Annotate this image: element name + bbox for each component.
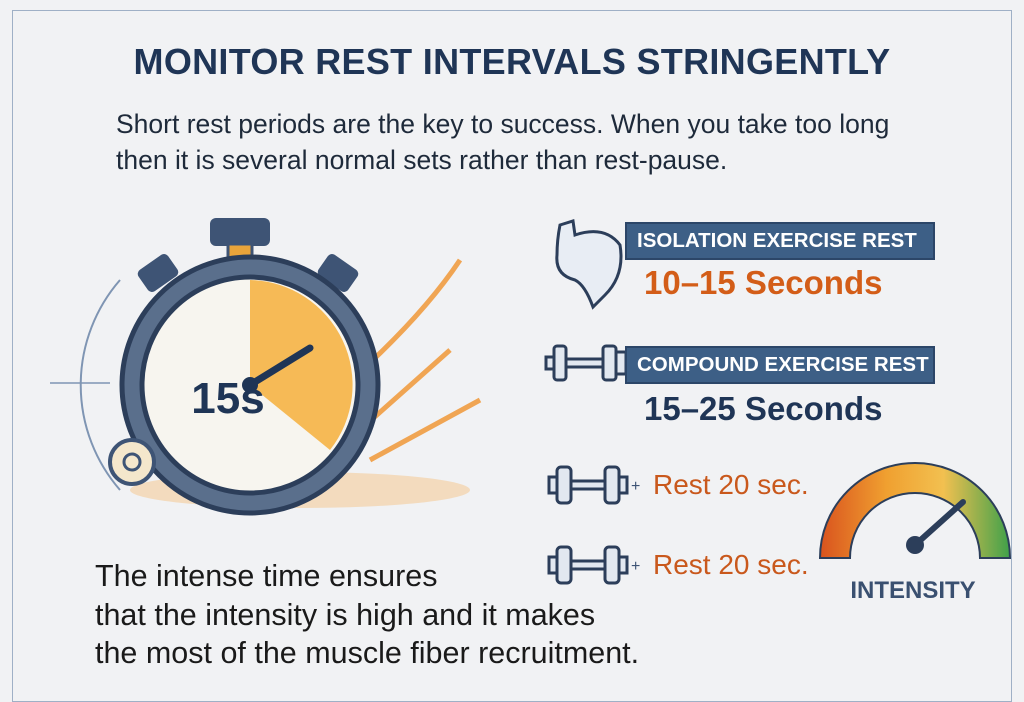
- rest row 1: Rest 20 sec.: [653, 469, 809, 500]
- banner: compound: [625, 346, 935, 384]
- bottom text: that the intensity is high and it makes: [95, 598, 595, 632]
- icon: barbell: [544, 344, 625, 382]
- subtitle text: [116, 109, 889, 175]
- gauge: intensity: [819, 462, 1011, 604]
- gauge: intensity: INTENSITY: [850, 577, 976, 604]
- bottom text: The intense time ensures: [95, 559, 437, 593]
- rest row 2: [548, 546, 809, 584]
- rest row 1: [548, 466, 809, 504]
- subtitle text: Short rest periods are the key to success. When you take too long: [116, 109, 889, 139]
- rest row 2: +: [631, 558, 640, 575]
- banner: isolation: ISOLATION EXERCISE REST: [637, 229, 917, 252]
- banner: compound: COMPOUND EXERCISE REST: [637, 353, 929, 376]
- subtitle text: then it is several normal sets rather than rest-pause.: [116, 145, 727, 175]
- bottom text: [95, 559, 639, 670]
- isolation value: 10–15 Seconds: [644, 264, 882, 301]
- stopwatch illustration: [50, 218, 482, 516]
- rest row 2: Rest 20 sec.: [653, 549, 809, 580]
- title: MONITOR REST INTERVALS STRINGENTLY: [134, 41, 890, 82]
- icon: muscle arm: [555, 219, 622, 310]
- rest row 1: +: [631, 478, 640, 495]
- banner: isolation: [625, 222, 935, 260]
- bottom text: the most of the muscle fiber recruitment.: [95, 636, 639, 670]
- compound value: 15–25 Seconds: [644, 390, 882, 427]
- stopwatch illustration: 15s: [191, 374, 265, 423]
